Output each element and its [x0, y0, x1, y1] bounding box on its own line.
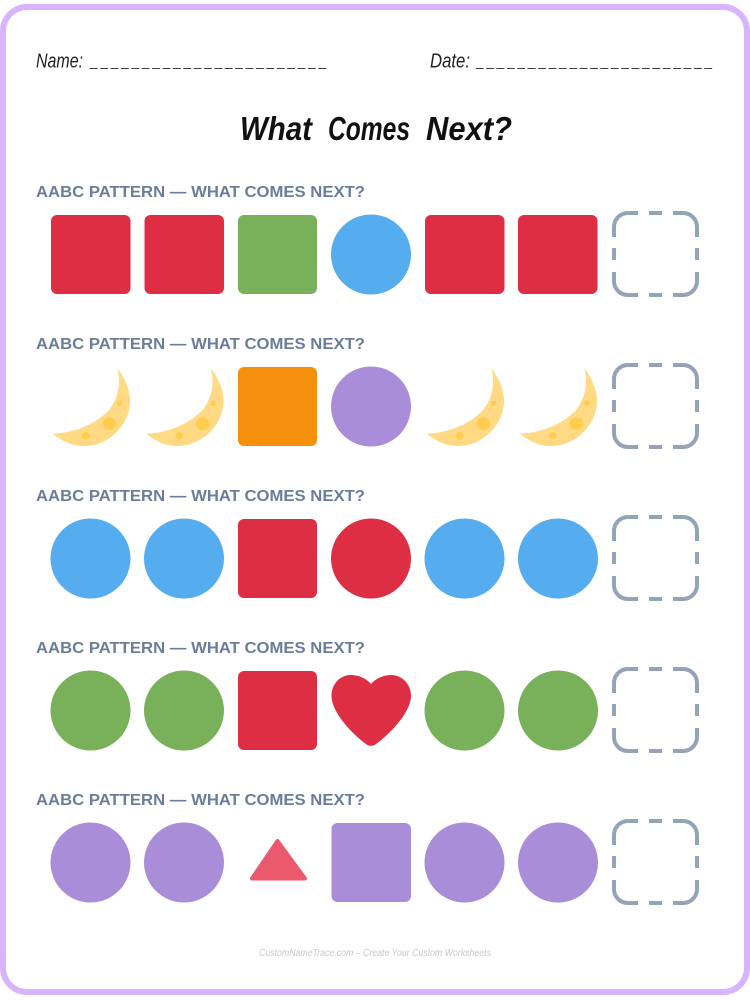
moon — [427, 368, 504, 446]
moon — [520, 368, 597, 446]
name field — [36, 50, 326, 72]
row 2 label: AABC PATTERN — WHAT COMES NEXT? — [36, 336, 365, 353]
blue circle — [518, 518, 598, 598]
blue circle — [144, 518, 224, 598]
row 1 — [36, 184, 697, 295]
blue circle — [424, 518, 504, 598]
red circle — [331, 518, 411, 598]
footer: CustomNameTrace.com – Create Your Custom Worksheets — [259, 947, 492, 959]
row 5 — [36, 792, 697, 903]
date field: Date: — [430, 50, 470, 72]
row 3 label: AABC PATTERN — WHAT COMES NEXT? — [36, 488, 365, 505]
green circle — [50, 670, 130, 750]
pink triangle — [252, 841, 305, 878]
row 2 — [36, 336, 697, 447]
title: Next? — [426, 110, 512, 147]
purple circle — [50, 822, 130, 902]
red square — [518, 215, 598, 294]
empty answer box — [614, 213, 697, 295]
title: What — [240, 110, 314, 147]
name field: _______________________ — [89, 54, 326, 69]
date field: _______________________ — [475, 54, 712, 69]
name field: Name: — [36, 50, 83, 72]
row 4 — [36, 640, 697, 751]
date field — [430, 50, 712, 72]
purple circle — [518, 822, 598, 902]
red square — [238, 519, 317, 598]
row 4 label: AABC PATTERN — WHAT COMES NEXT? — [36, 640, 365, 657]
green square — [238, 215, 317, 294]
empty answer box — [614, 669, 697, 751]
purple circle — [424, 822, 504, 902]
purple square — [332, 823, 411, 902]
moon — [53, 368, 130, 446]
orange square — [238, 367, 317, 446]
empty answer box — [614, 821, 697, 903]
purple circle — [144, 822, 224, 902]
row 1 label: AABC PATTERN — WHAT COMES NEXT? — [36, 184, 365, 201]
row 5 label: AABC PATTERN — WHAT COMES NEXT? — [36, 792, 365, 809]
blue circle — [50, 518, 130, 598]
red square — [144, 215, 224, 294]
green circle — [518, 670, 598, 750]
empty answer box — [614, 517, 697, 599]
title — [240, 110, 512, 147]
red heart — [332, 675, 411, 746]
row 3 — [36, 488, 697, 599]
red square — [51, 215, 130, 294]
blue circle — [331, 214, 411, 294]
empty answer box — [614, 365, 697, 447]
green circle — [144, 670, 224, 750]
green circle — [424, 670, 504, 750]
red square — [425, 215, 504, 294]
red square — [238, 671, 317, 750]
purple circle — [331, 366, 411, 446]
moon — [146, 368, 224, 446]
title: Comes — [328, 110, 410, 147]
